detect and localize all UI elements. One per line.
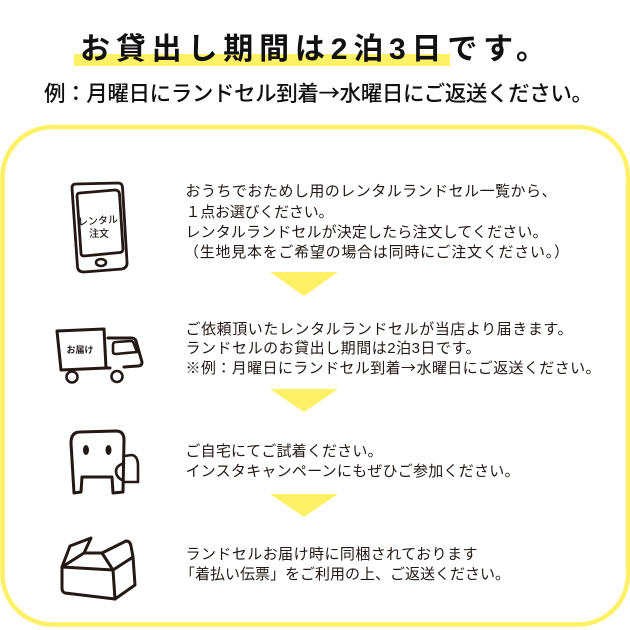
step 2 text: ご依頼頂いたレンタルランドセルが当店より届きます。: [186, 321, 572, 338]
icon: school backpack: [71, 431, 138, 493]
arrow 1: [270, 272, 338, 296]
step 1 text: [184, 183, 569, 261]
title highlight: [74, 54, 450, 66]
icon: delivery truck: お届け: [66, 345, 94, 355]
title: お貸出し期間は2泊3日です。: [80, 33, 546, 66]
subtitle: 例：月曜日にランドセル到着→水曜日にご返送ください。: [44, 77, 593, 108]
arrow 3: [270, 494, 338, 517]
icon: smartphone: レンタル: [78, 214, 118, 228]
step 3 text: [186, 443, 520, 480]
step 4 text: 「着払い伝票」をご利用の上、ご返送ください。: [180, 566, 510, 583]
icon: smartphone: [72, 183, 127, 272]
icon: smartphone: 注文: [89, 227, 109, 240]
step 1 text: （生地見本をご希望の場合は同時にご注文ください。）: [184, 244, 569, 261]
panel: rental steps: [2, 127, 628, 624]
step 1 text: レンタルランドセルが決定したら注文してください。: [186, 224, 548, 241]
step 2 text: ※例：月曜日にランドセル到着→水曜日にご返送ください。: [186, 357, 600, 378]
icon: delivery truck: [57, 329, 142, 382]
arrow 2: [270, 389, 338, 412]
step 1 text: おうちでおためし用のレンタルランドセル一覧から、: [186, 183, 556, 200]
step 2 text: ランドセルのお貸出し期間は2泊3日です。: [186, 340, 480, 357]
step 3 text: ご自宅にてご試着ください。: [186, 443, 382, 460]
step 4 text: [180, 546, 510, 583]
step 3 text: インスタキャンペーンにもぜひご参加ください。: [186, 463, 520, 480]
step 2 text: [186, 321, 600, 378]
step 1 text: １点お選びください。: [186, 204, 334, 221]
icon: cardboard box: [62, 538, 135, 599]
step 4 text: ランドセルお届け時に同梱されております: [186, 546, 478, 563]
